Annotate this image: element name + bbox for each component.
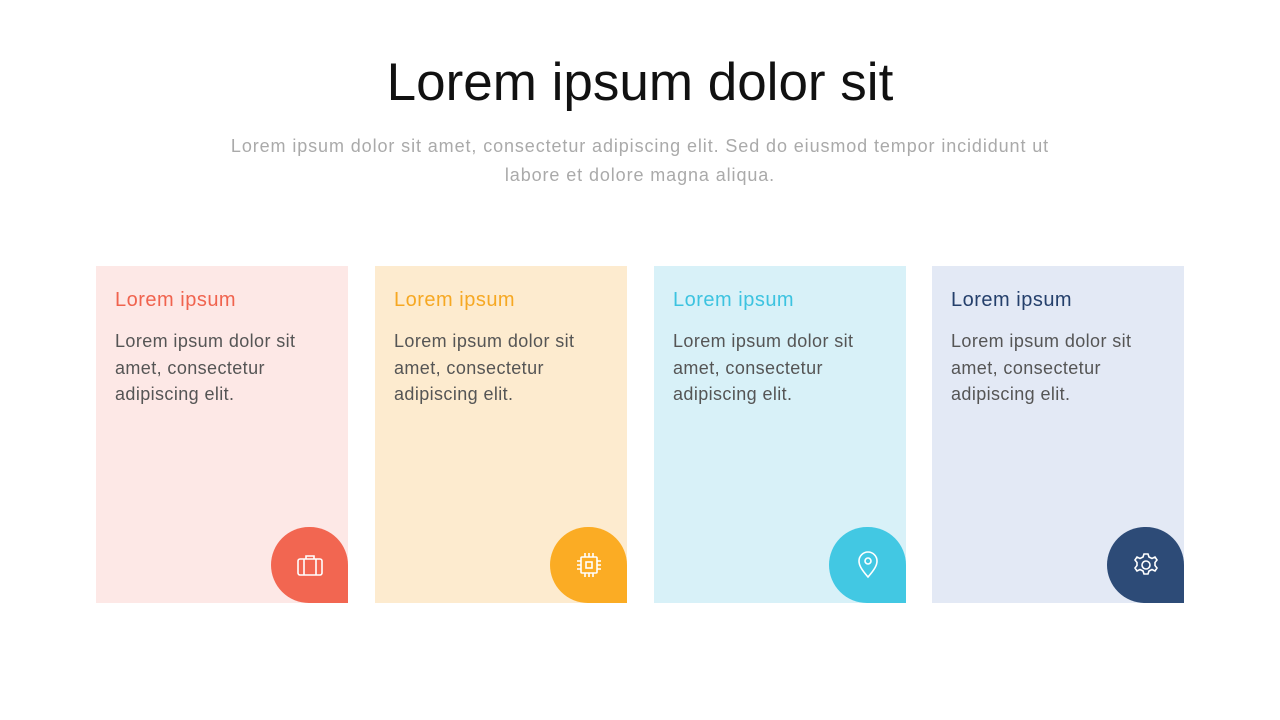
text 4: Lorem ipsum dolor sit [951, 331, 1131, 351]
icon: location pin [829, 527, 906, 603]
text 2: adipiscing elit. [394, 384, 513, 404]
text 2: amet, consectetur [394, 358, 544, 378]
panel: card 1 [96, 266, 348, 603]
subtitle: Lorem ipsum dolor sit amet, consectetur adipiscing elit. Sed do eiusmod tempor incididunt ut [231, 136, 1049, 156]
heading 2: Lorem ipsum [394, 289, 515, 311]
text 2 [394, 331, 574, 404]
text 1 [115, 331, 295, 404]
heading 3: Lorem ipsum [673, 289, 794, 311]
text 2: Lorem ipsum dolor sit [394, 331, 574, 351]
text 4 [951, 331, 1131, 404]
panel: card 4 [932, 266, 1184, 603]
text 1: amet, consectetur [115, 358, 265, 378]
icon: briefcase [271, 527, 348, 603]
subtitle: labore et dolore magna aliqua. [505, 165, 775, 185]
subtitle [231, 136, 1049, 185]
heading 1: Lorem ipsum [115, 289, 236, 311]
text 3: Lorem ipsum dolor sit [673, 331, 853, 351]
heading 4: Lorem ipsum [951, 289, 1072, 311]
text 3 [673, 331, 853, 404]
text 3: adipiscing elit. [673, 384, 792, 404]
panel: card 2 [375, 266, 627, 603]
text 4: amet, consectetur [951, 358, 1101, 378]
text 1: Lorem ipsum dolor sit [115, 331, 295, 351]
title: Lorem ipsum dolor sit [387, 53, 893, 112]
icon: chip [550, 527, 627, 603]
icon: gear [1107, 527, 1184, 603]
text 4: adipiscing elit. [951, 384, 1070, 404]
text 1: adipiscing elit. [115, 384, 234, 404]
text 3: amet, consectetur [673, 358, 823, 378]
panel: card 3 [654, 266, 906, 603]
